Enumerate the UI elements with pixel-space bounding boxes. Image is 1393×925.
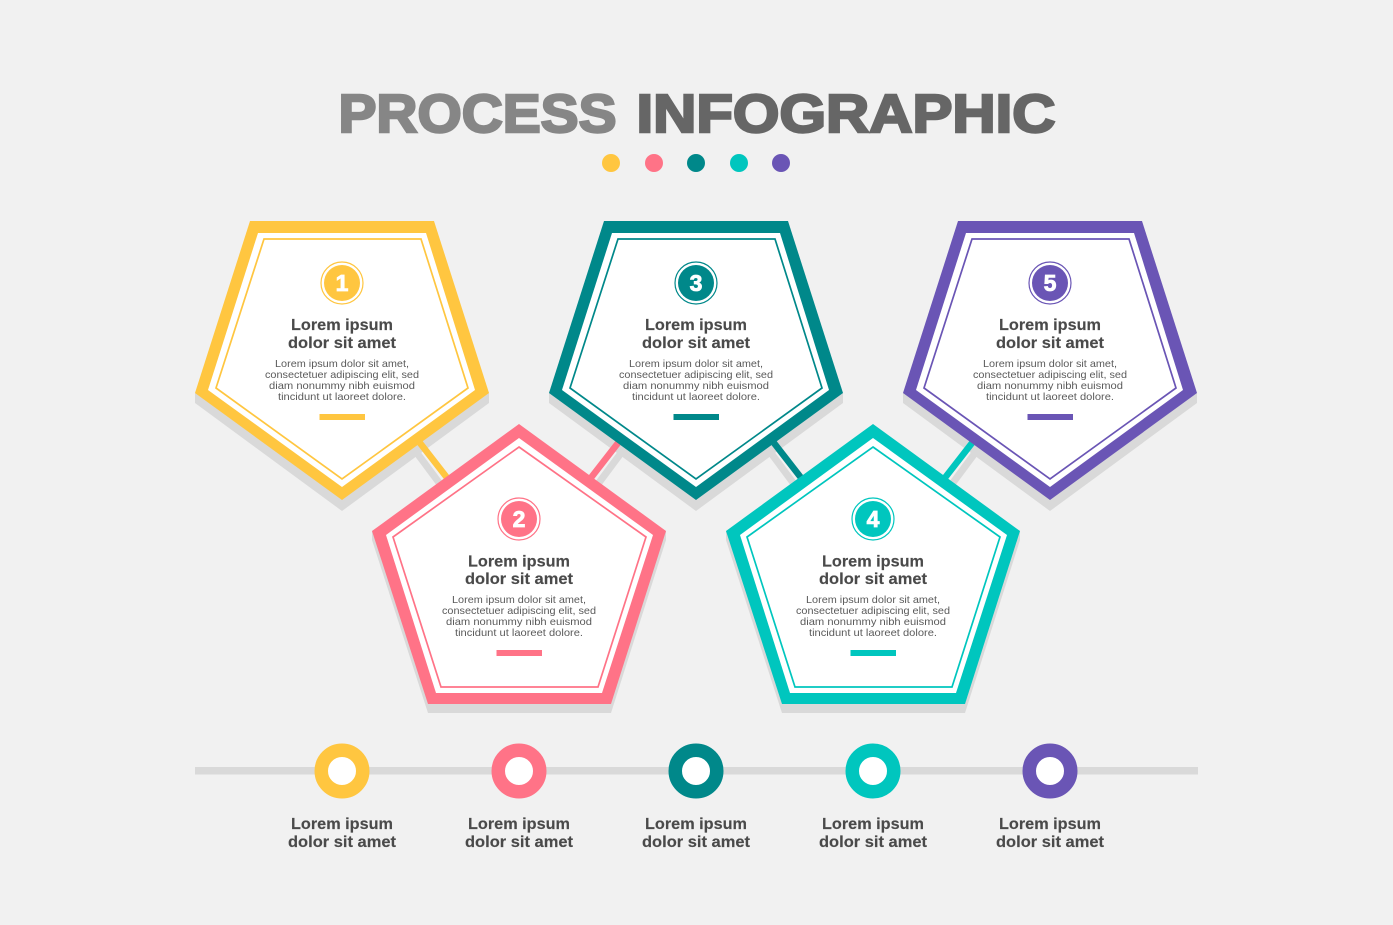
accent bar [674,414,719,420]
badge: number 4 [852,498,894,540]
body text: diam nonummy nibh euismod [977,381,1123,392]
panel: step 5 [903,221,1197,500]
heading: dolor sit amet [288,335,396,352]
timeline label 2: Lorem ipsum [468,816,570,833]
timeline label 1 [288,816,396,851]
body text: Lorem ipsum dolor sit amet, [983,359,1117,370]
body text: consectetuer adipiscing elit, sed [619,370,773,381]
timeline label 3: dolor sit amet [642,834,750,851]
title colour dots [602,154,790,172]
timeline marker 3 [675,750,717,792]
timeline label 2: dolor sit amet [465,834,573,851]
body text: consectetuer adipiscing elit, sed [796,606,950,617]
heading: Lorem ipsum [999,317,1101,334]
heading: dolor sit amet [819,571,927,588]
body text [265,359,419,403]
timeline [195,750,1198,851]
body text: tincidunt ut laoreet dolore. [278,392,406,403]
badge: number 5 [1029,262,1071,304]
timeline label 3 [642,816,750,851]
heading: dolor sit amet [465,571,573,588]
body text [442,595,596,639]
connector: step 3 to step 2 [590,443,618,479]
badge: number 4: 4 [867,506,880,532]
body text: Lorem ipsum dolor sit amet, [452,595,586,606]
timeline track [195,767,1198,774]
heading: Lorem ipsum [645,317,747,334]
body text: tincidunt ut laoreet dolore. [455,628,583,639]
title: INFOGRAPHIC [636,85,1056,144]
connector: step 1 to step 2 [420,443,448,479]
timeline marker 2 [498,750,540,792]
heading [819,554,927,588]
badge: number 1 [321,262,363,304]
heading: dolor sit amet [996,335,1104,352]
body text: tincidunt ut laoreet dolore. [809,628,937,639]
panel: step 2 [372,424,666,704]
body text: tincidunt ut laoreet dolore. [986,392,1114,403]
badge: number 3: 3 [690,270,702,296]
body text: tincidunt ut laoreet dolore. [632,392,760,403]
body text: Lorem ipsum dolor sit amet, [629,359,763,370]
body text: diam nonummy nibh euismod [446,617,592,628]
timeline label 5 [996,816,1104,851]
heading: Lorem ipsum [822,554,924,570]
timeline label 3: Lorem ipsum [645,816,747,833]
accent bar [850,650,896,656]
body text [973,359,1127,403]
heading [996,317,1104,352]
badge: number 5: 5 [1044,270,1057,296]
title [338,85,1056,144]
body text: consectetuer adipiscing elit, sed [442,606,596,617]
body text: Lorem ipsum dolor sit amet, [806,595,940,606]
accent bar [1028,414,1073,420]
panel: step 4 [726,424,1020,704]
body text [619,359,773,403]
title: PROCESS [338,85,616,144]
heading [642,317,750,352]
heading [465,554,573,588]
accent bar [320,414,365,420]
connector shadows [414,449,978,484]
body text: consectetuer adipiscing elit, sed [973,370,1127,381]
timeline label 5: Lorem ipsum [999,816,1101,833]
timeline label 4: Lorem ipsum [822,816,924,833]
body text: diam nonummy nibh euismod [800,617,946,628]
heading: dolor sit amet [642,335,750,352]
panel: step 3 [549,221,843,500]
timeline label 4 [819,816,927,851]
badge: number 2 [498,498,540,540]
body text: consectetuer adipiscing elit, sed [265,370,419,381]
timeline label 1: Lorem ipsum [291,816,393,833]
connector: step 3 to step 4 [774,443,802,479]
badge: number 1: 1 [336,270,349,296]
body text: Lorem ipsum dolor sit amet, [275,359,409,370]
timeline marker 1 [321,750,363,792]
body text: diam nonummy nibh euismod [623,381,769,392]
badge: number 3 [675,262,717,304]
timeline label 4: dolor sit amet [819,834,927,851]
accent bar [496,650,542,656]
panel: step 1 [195,221,489,500]
heading: Lorem ipsum [468,554,570,570]
timeline marker 4 [852,750,894,792]
heading: Lorem ipsum [291,317,393,334]
badge: number 2: 2 [513,506,525,532]
timeline label 1: dolor sit amet [288,834,396,851]
body text [796,595,950,639]
heading [288,317,396,352]
timeline label 2 [465,816,573,851]
connector: step 5 to step 4 [944,443,972,479]
timeline marker 5 [1029,750,1071,792]
timeline label 5: dolor sit amet [996,834,1104,851]
body text: diam nonummy nibh euismod [269,381,415,392]
pentagon drop shadows [195,393,1197,713]
